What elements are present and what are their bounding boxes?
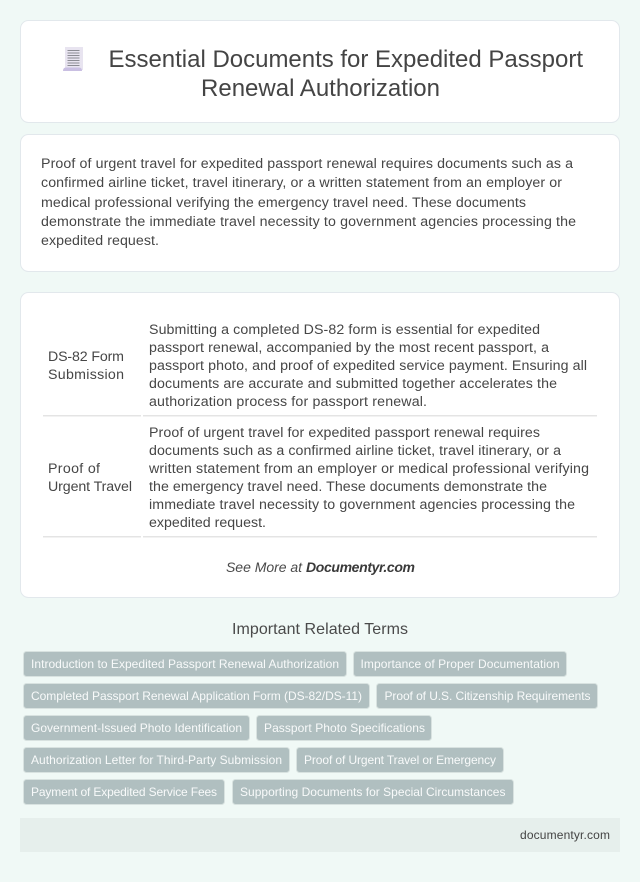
related term chips: Proof of Urgent Travel or Emergency (304, 753, 496, 767)
row: Proof of Urgent Travel: Urgent Travel (48, 479, 132, 495)
row: Proof of Urgent Travel: documents such as a confirmed airline ticket, travel itinerary, or a (149, 443, 561, 459)
related term chips: Importance of Proper Documentation (360, 657, 560, 671)
related term chips (24, 652, 598, 804)
intro text: medical professional verifying the emergency travel need. These documents (41, 195, 526, 211)
see more link (226, 559, 415, 575)
related term chips: Supporting Documents for Special Circumstances (240, 785, 506, 799)
intro text (41, 156, 576, 249)
row: Proof of Urgent Travel: the emergency travel need. These documents demonstrate the (149, 479, 547, 495)
row: Proof of Urgent Travel (48, 425, 589, 531)
related term chips: Proof of U.S. Citizenship Requirements (384, 689, 590, 703)
intro text: demonstrate the immediate travel necessity to government agencies processing the (41, 214, 576, 230)
row: Proof of Urgent Travel: Proof of (48, 461, 100, 477)
title: Essential Documents for Expedited Passport (108, 46, 583, 73)
row: DS-82 Form Submission (48, 322, 587, 410)
related term chips: Government-Issued Photo Identification (31, 721, 242, 735)
row: DS-82 Form Submission: documents are accurate and submitted together accelerates the (149, 376, 557, 392)
see more link: See More at (226, 559, 303, 575)
row: Proof of Urgent Travel: written statement from an employer or medical professional verifying (148, 461, 589, 477)
icon: document scroll (63, 47, 83, 71)
row: Proof of Urgent Travel: expedited request. (149, 515, 266, 531)
row: DS-82 Form Submission: Submitting a completed DS-82 form is essential for expedited (149, 322, 540, 338)
row: DS-82 Form Submission: passport renewal, accompanied by the most recent passport, a (149, 340, 549, 356)
related term chips: Payment of Expedited Service Fees (31, 785, 217, 799)
see more link: Documentyr.com (306, 559, 415, 575)
related term chips: Passport Photo Specifications (264, 721, 425, 735)
related term chips: Completed Passport Renewal Application Form (DS-82/DS-11) (31, 689, 362, 703)
footer (20, 818, 620, 852)
intro text: Proof of urgent travel for expedited passport renewal requires documents such as a (41, 156, 573, 172)
intro text: expedited request. (41, 233, 159, 249)
title (108, 46, 583, 102)
row: DS-82 Form Submission: authorization process for passport renewal. (149, 394, 427, 410)
row: Proof of Urgent Travel: immediate travel necessity to government agencies processing the (149, 497, 575, 513)
row: DS-82 Form Submission: Submission (48, 367, 124, 383)
panel: documents table (20, 292, 620, 598)
intro text: confirmed airline ticket, travel itinerary, or a written statement from an employer or (41, 175, 562, 191)
row: DS-82 Form Submission: DS-82 Form (48, 349, 124, 365)
row: Proof of Urgent Travel: Proof of urgent travel for expedited passport renewal requires (149, 425, 540, 441)
panel: intro paragraph (20, 134, 620, 272)
panel: header (20, 20, 620, 122)
title: Renewal Authorization (201, 75, 440, 102)
row: DS-82 Form Submission: passport photo, and proof of expedited service payment. Ensuring all (149, 358, 587, 374)
related term chips: Authorization Letter for Third-Party Submission (31, 753, 282, 767)
footer: documentyr.com (520, 828, 610, 842)
heading: related terms: Important Related Terms (232, 621, 408, 638)
related term chips: Introduction to Expedited Passport Renewal Authorization (31, 657, 339, 671)
